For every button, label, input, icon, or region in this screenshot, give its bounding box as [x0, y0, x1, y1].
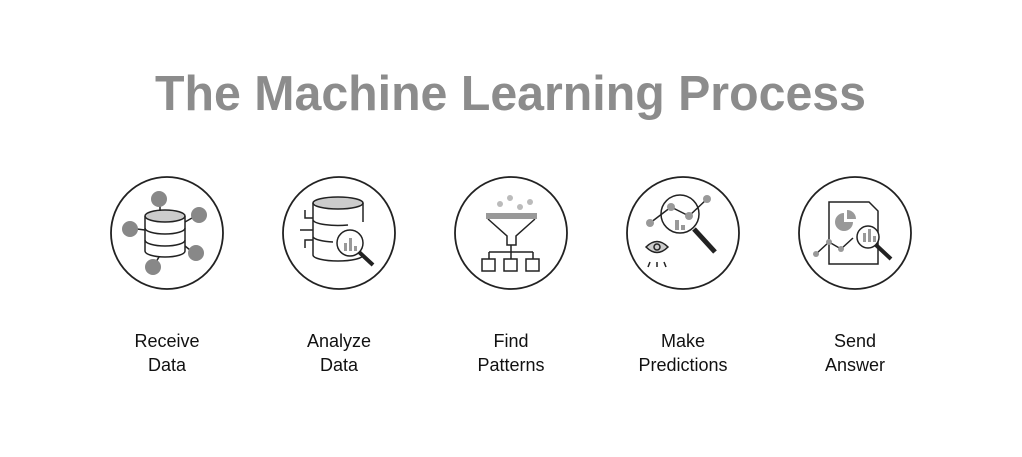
label: Make [661, 331, 705, 351]
label: Find [493, 331, 529, 351]
step: find patterns [455, 177, 567, 375]
icon: funnel [455, 177, 567, 289]
icon: report with magnifier [799, 177, 911, 289]
step: send answer: Answer [825, 355, 885, 375]
title: The Machine Learning Process [155, 67, 866, 121]
icon: chart, magnifier, eye [627, 177, 739, 289]
step: receive data [111, 177, 223, 375]
icon: database with inputs [111, 177, 223, 289]
label: Analyze [307, 331, 371, 351]
step: send answer [799, 177, 911, 375]
step: make predictions: Predictions [638, 355, 728, 375]
step: analyze data: Data [320, 355, 359, 375]
label: Receive [134, 331, 200, 351]
icon: database with magnifier [283, 177, 395, 289]
label: Send [834, 331, 876, 351]
step: analyze data [283, 177, 395, 375]
step: find patterns: Patterns [477, 355, 545, 375]
step: make predictions [627, 177, 739, 375]
step: receive data: Data [148, 355, 187, 375]
